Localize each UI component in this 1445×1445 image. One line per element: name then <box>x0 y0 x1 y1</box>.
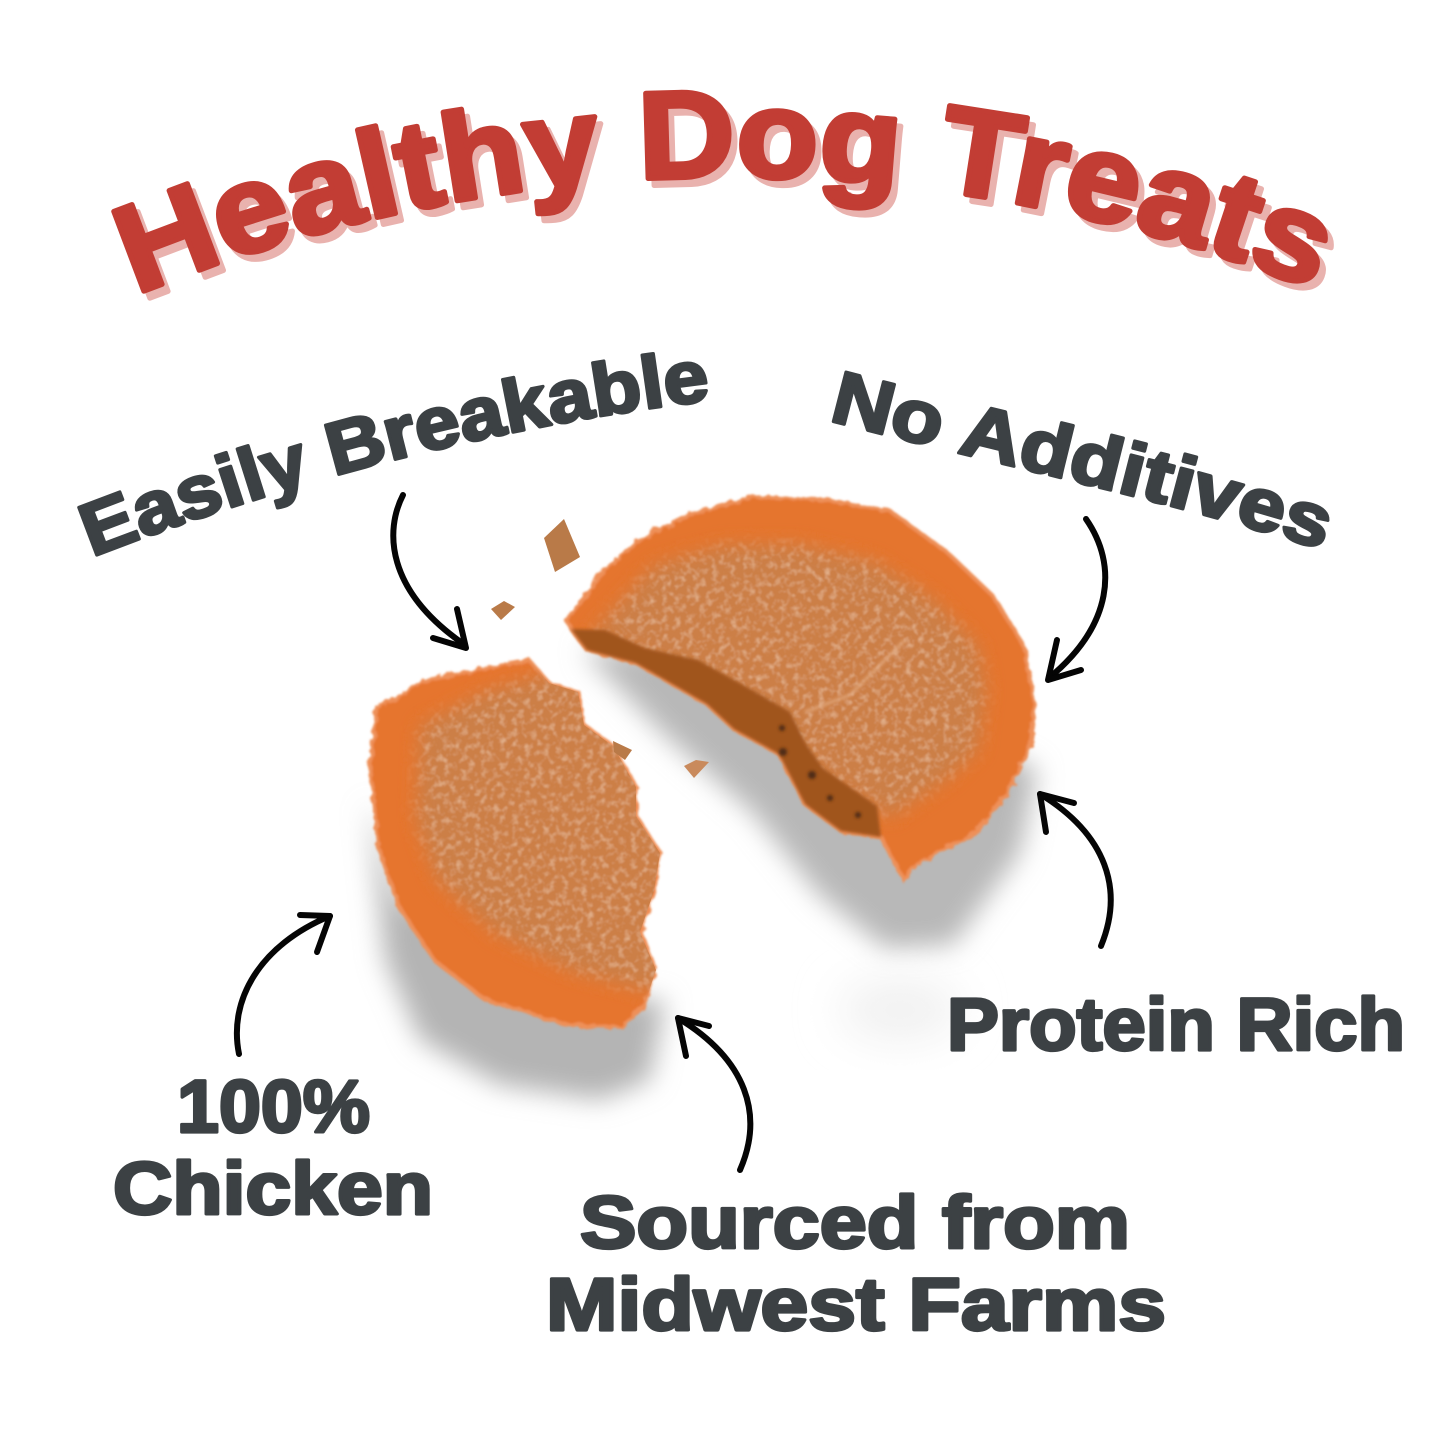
treat: right broken piece <box>567 497 1035 880</box>
label: Easily Breakable: Easily Breakable <box>77 352 708 557</box>
arrow: Protein Rich to treat <box>1040 794 1111 946</box>
arrow: No Additives to treat <box>1048 519 1105 680</box>
right piece tan crumb <box>590 545 986 818</box>
label: Sourced from Midwest Farms <box>546 1181 1166 1346</box>
label: 100% Chicken: Chicken <box>113 1147 433 1230</box>
treat shadow: left piece <box>368 800 665 1100</box>
treat shadow: right piece <box>582 650 1037 1040</box>
label: No Additives: No Additives <box>832 370 1330 547</box>
label: 100% Chicken: 100% <box>177 1065 370 1148</box>
title: Healthy Dog Treats <box>136 108 1334 301</box>
arrow: Easily Breakable to treat <box>393 495 466 648</box>
treat: left broken piece <box>370 660 700 1028</box>
right piece pits and crack <box>779 640 905 818</box>
right piece orange rim <box>567 497 1035 880</box>
left piece orange rim <box>370 660 660 1028</box>
right piece dark fracture <box>571 629 881 837</box>
label: Protein Rich: Protein Rich <box>947 983 1405 1066</box>
arrow: 100% Chicken to treat <box>237 915 330 1054</box>
title: Healthy Dog Treats <box>111 90 1328 294</box>
crumbs <box>491 519 709 778</box>
label: Sourced from Midwest Farms: Midwest Farms <box>546 1263 1166 1346</box>
label: 100% Chicken <box>113 1065 433 1230</box>
arrow: Sourced from Midwest Farms to treat <box>678 1018 750 1170</box>
label: Sourced from Midwest Farms: Sourced from <box>580 1181 1130 1264</box>
left piece tan crumb <box>416 670 700 990</box>
